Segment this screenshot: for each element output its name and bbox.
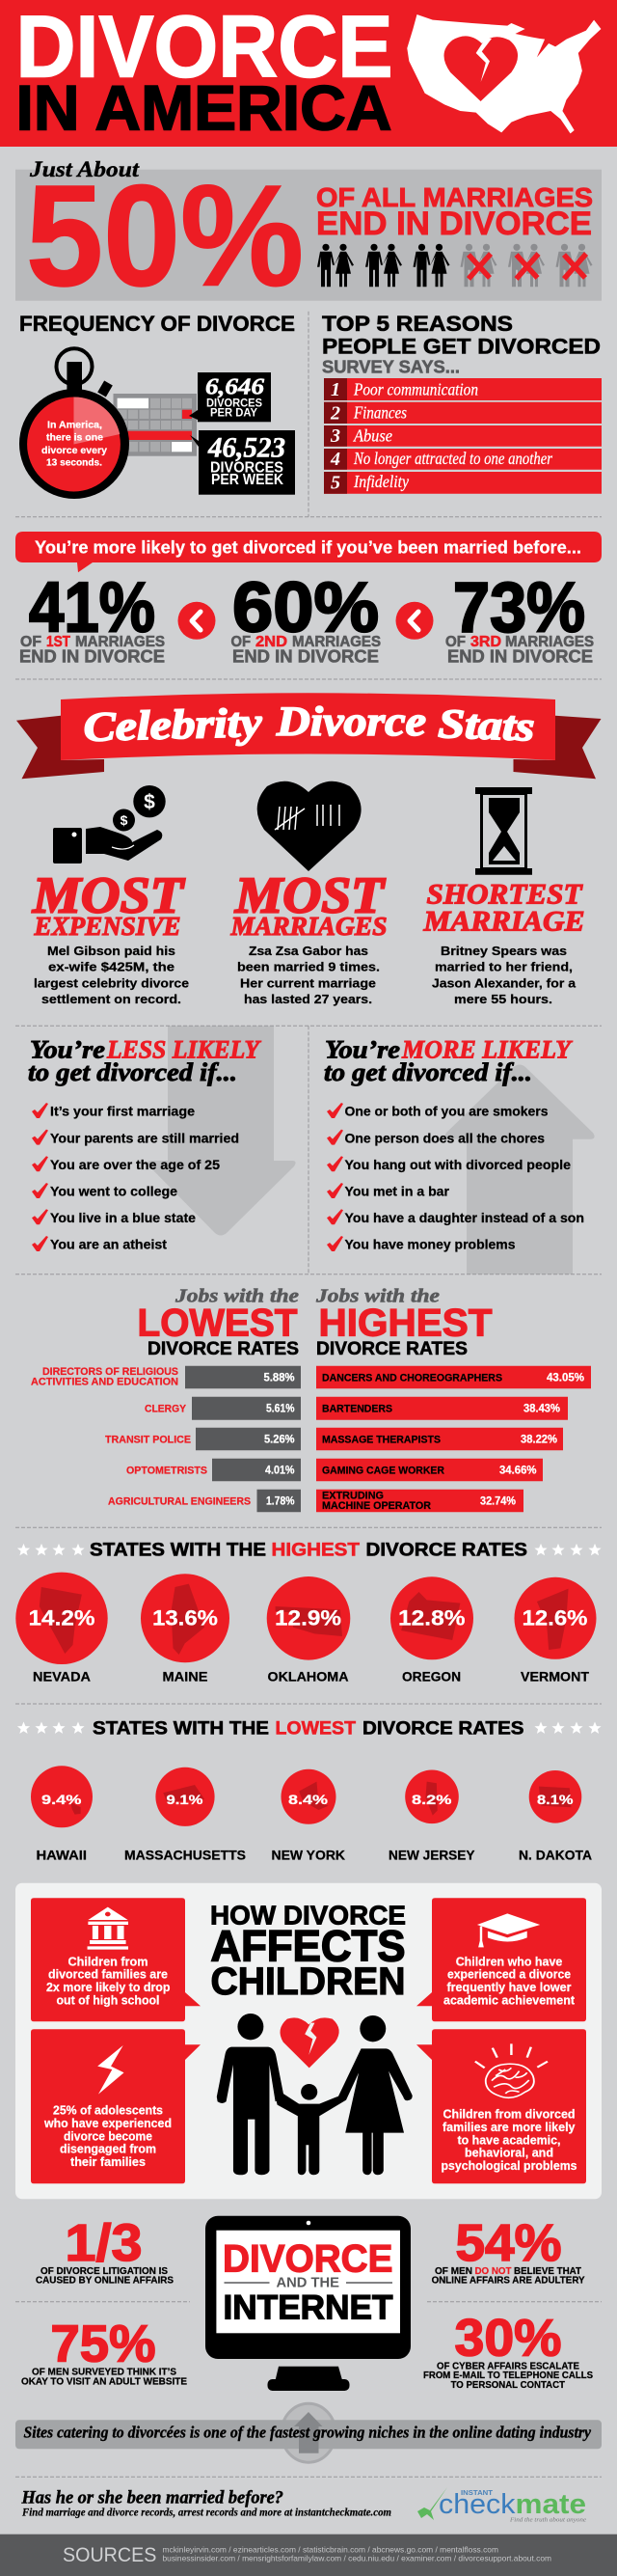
box: academic achievement: Children who have bbox=[456, 1955, 562, 1968]
stat: maine bbox=[141, 1574, 229, 1685]
callout: per day bbox=[189, 372, 271, 422]
text: every 13 seconds: there is one bbox=[46, 432, 103, 444]
stat: new jersey bbox=[389, 1769, 474, 1862]
footer: sources: SOURCES bbox=[63, 2544, 156, 2566]
stat: 30 percent bbox=[423, 2309, 593, 2391]
list: more likely: You met in a bar bbox=[345, 1185, 450, 1199]
stat: maine: 13.6% bbox=[152, 1605, 218, 1630]
list: more likely: You have money problems bbox=[345, 1238, 515, 1252]
box: drop out: out of high school bbox=[56, 1993, 160, 2007]
stat: north dakota: N. DAKOTA bbox=[519, 1848, 592, 1862]
section: top 5 reasons bbox=[322, 312, 602, 494]
column: shortest marriage: MARRIAGE bbox=[422, 905, 584, 938]
stat: 75 percent: OKAY TO VISIT AN ADULT WEBSITE bbox=[21, 2375, 187, 2387]
heading: lowest jobs: LOWEST bbox=[137, 1302, 297, 1345]
list: reasons: 5 bbox=[331, 473, 340, 494]
heading: divorce and the internet: AND THE bbox=[276, 2276, 339, 2291]
bar chart: highest divorce rates: BARTENDERS bbox=[322, 1403, 392, 1414]
box: drop out: 2x more likely to drop bbox=[46, 1981, 171, 1994]
stat: 30 percent: FROM E-MAIL TO TELEPHONE CALLS bbox=[423, 2370, 593, 2381]
box: academic achievement: experienced a divorce bbox=[447, 1968, 571, 1982]
label: just about: Just About bbox=[29, 157, 140, 181]
logo: instant checkmate: Find the truth about anyone bbox=[509, 2516, 586, 2523]
stat: massachusetts: 9.1% bbox=[166, 1792, 203, 1807]
heading: highest jobs: Jobs with the bbox=[315, 1285, 440, 1306]
call to action: Find marriage and divorce records, arrest records and more at instantcheckmate.com bbox=[21, 2507, 391, 2518]
stat: north dakota: 8.1% bbox=[537, 1792, 574, 1807]
list: reasons: Infidelity bbox=[353, 472, 409, 491]
arrow: down bbox=[148, 1026, 296, 1235]
stat: vermont bbox=[515, 1577, 596, 1685]
text: britney spears: Britney Spears was bbox=[441, 944, 567, 958]
list: less likely: You went to college bbox=[50, 1185, 178, 1199]
heading: states lowest bbox=[17, 1717, 602, 1739]
stat: nevada: NEVADA bbox=[33, 1670, 91, 1685]
stat: 30 percent: TO PERSONAL CONTACT bbox=[451, 2379, 566, 2391]
stat: 60 percent: 2ND bbox=[255, 634, 287, 650]
bar chart: highest divorce rates: DANCERS AND CHOREOGRAPHERS bbox=[322, 1372, 502, 1384]
banner: celebrity divorce stats: Celebrity bbox=[83, 700, 263, 751]
bar chart: lowest divorce rates: TRANSIT POLICE bbox=[105, 1434, 191, 1445]
heading: highest jobs bbox=[315, 1285, 492, 1359]
box: disengaged: 25% of adolescents bbox=[53, 2104, 163, 2118]
stat: new jersey: NEW JERSEY bbox=[389, 1848, 474, 1862]
panel: 50 percent bbox=[15, 154, 602, 316]
list: reasons: 2 bbox=[330, 403, 340, 425]
logo: instant checkmate: INSTANT bbox=[461, 2488, 493, 2497]
callout: per week bbox=[190, 430, 295, 495]
bar chart: highest divorce rates: 38.43% bbox=[523, 1403, 560, 1414]
heading: highest jobs: DIVORCE RATES bbox=[316, 1338, 468, 1359]
stat: 60 percent: MARRIAGES bbox=[292, 634, 381, 650]
stat: 54 percent bbox=[432, 2214, 585, 2287]
text: britney spears: Jason Alexander, for a bbox=[432, 975, 577, 990]
text: mel gibson: largest celebrity divorce bbox=[34, 975, 189, 990]
text: end in divorce: END IN DIVORCE bbox=[316, 206, 592, 242]
stat: vermont: VERMONT bbox=[521, 1670, 590, 1685]
stat: 73 percent: OF bbox=[445, 634, 466, 650]
stat: oregon bbox=[390, 1576, 473, 1685]
text: mel gibson: Mel Gibson paid his bbox=[47, 944, 175, 958]
heading: frequency: FREQUENCY OF DIVORCE bbox=[19, 312, 295, 336]
column: most expensive: EXPENSIVE bbox=[33, 912, 181, 941]
list: reasons: 3 bbox=[330, 425, 340, 447]
panel: more likely: MORE LIKELY bbox=[401, 1036, 573, 1064]
stat: 60 percent: END IN DIVORCE bbox=[232, 646, 379, 667]
bar chart: lowest divorce rates: AGRICULTURAL ENGINEERS bbox=[108, 1495, 251, 1507]
list: reasons: No longer attracted to one another bbox=[353, 449, 552, 468]
icon: calendar bbox=[114, 394, 197, 456]
text: every 13 seconds: In America, bbox=[47, 419, 102, 430]
text: zsa zsa: been married 9 times. bbox=[237, 960, 380, 974]
column: most marriages: MARRIAGES bbox=[229, 912, 388, 941]
bar chart: lowest divorce rates: CLERGY bbox=[145, 1403, 187, 1414]
text: zsa zsa bbox=[237, 944, 380, 1006]
logo: instant checkmate bbox=[417, 2487, 586, 2523]
text: every 13 seconds: divorce every bbox=[41, 445, 107, 456]
box: disengaged: who have experienced bbox=[43, 2117, 172, 2130]
panel: less likely bbox=[28, 1036, 261, 1252]
heading: top 5 reasons: PEOPLE GET DIVORCED bbox=[322, 335, 601, 359]
heading: lowest jobs bbox=[137, 1285, 299, 1359]
callout: married before: You’re more likely to get divorced if you’ve been married before... bbox=[35, 537, 581, 557]
icon: heart with tally marks bbox=[257, 781, 362, 871]
text: mel gibson bbox=[34, 944, 189, 1006]
stat: 73 percent: MARRIAGES bbox=[505, 634, 594, 650]
list: less likely: You are over the age of 25 bbox=[50, 1158, 221, 1172]
column: shortest marriage bbox=[422, 787, 584, 1006]
heading: highest jobs: HIGHEST bbox=[318, 1302, 492, 1345]
icon: US map with broken heart bbox=[407, 14, 601, 133]
stat: new york: 8.4% bbox=[288, 1792, 329, 1807]
stat: 54 percent: DO NOT bbox=[474, 2265, 512, 2277]
stat: massachusetts bbox=[124, 1768, 246, 1862]
stat: oklahoma: 12.9% bbox=[275, 1605, 341, 1630]
banner: celebrity divorce stats: Divorce bbox=[276, 699, 426, 745]
banner: celebrity divorce stats bbox=[16, 693, 602, 779]
stat: 54 percent: ONLINE AFFAIRS ARE ADULTERY bbox=[432, 2275, 585, 2287]
text: zsa zsa: Zsa Zsa Gabor has bbox=[249, 944, 368, 958]
column: most marriages bbox=[229, 781, 388, 1006]
callout: married before bbox=[15, 532, 602, 572]
bar chart: highest divorce rates: 32.74% bbox=[480, 1495, 516, 1507]
stat: 54 percent: 54% bbox=[455, 2214, 561, 2272]
list: reasons: Poor communication bbox=[353, 379, 478, 398]
callout: fastest growing niches bbox=[15, 2403, 602, 2462]
list: reasons bbox=[324, 378, 602, 494]
text: britney spears: married to her friend, bbox=[435, 960, 573, 974]
stat: north dakota bbox=[519, 1770, 592, 1862]
icon: school bbox=[88, 1907, 128, 1950]
stat: 73 percent: 73% bbox=[453, 569, 585, 646]
column: most expensive bbox=[32, 785, 189, 1006]
stat: 41 percent: 41% bbox=[29, 569, 155, 646]
list: reasons: 4 bbox=[330, 449, 340, 470]
stat: nevada bbox=[15, 1573, 108, 1685]
heading: divorce and the internet bbox=[223, 2238, 393, 2327]
panel: more likely: You’re bbox=[325, 1036, 400, 1064]
icon: graduation cap bbox=[477, 1913, 540, 1947]
stat: maine: MAINE bbox=[162, 1670, 208, 1685]
text: zsa zsa: Her current marriage bbox=[240, 975, 376, 990]
list: less likely bbox=[50, 1105, 239, 1252]
heading: states lowest: STATES WITH THE bbox=[93, 1717, 269, 1739]
heading: lowest jobs: DIVORCE RATES bbox=[148, 1338, 299, 1359]
icon: lightning bbox=[97, 2045, 124, 2095]
footer: sources: businessinsider.com / mensrightsforfamilylaw.com / cedu.niu.edu / examiner.com / divorcesupport.about.com bbox=[162, 2554, 551, 2563]
heading: top 5 reasons: SURVEY SAYS... bbox=[322, 357, 460, 377]
stat: 60 percent: OF bbox=[231, 634, 251, 650]
stat: 30 percent: 30% bbox=[455, 2309, 561, 2367]
text: of all marriages: OF ALL MARRIAGES bbox=[316, 182, 593, 212]
icons: checks bbox=[327, 1103, 343, 1251]
list: more likely: You have a daughter instead of a son bbox=[345, 1211, 584, 1225]
list: less likely: You are an atheist bbox=[50, 1238, 168, 1252]
bar chart: highest divorce rates: 34.66% bbox=[499, 1465, 536, 1476]
callout: per week: PER WEEK bbox=[211, 472, 284, 488]
stat: hawaii bbox=[31, 1766, 93, 1862]
stat: 75 percent bbox=[21, 2315, 187, 2387]
arrow: up bbox=[444, 1065, 595, 1274]
stat: hawaii: 9.4% bbox=[41, 1792, 82, 1807]
stat: 73 percent: END IN DIVORCE bbox=[447, 646, 593, 667]
heading: how divorce affects children: HOW DIVORCE bbox=[210, 1900, 406, 1930]
stat: 54 percent: OF MEN bbox=[435, 2265, 472, 2277]
stat: one third: CAUSED BY ONLINE AFFAIRS bbox=[36, 2275, 174, 2287]
box: psychological problems: to have academic, bbox=[457, 2133, 561, 2147]
callout: per day: 6,646 bbox=[205, 374, 264, 399]
list: more likely: You hang out with divorced people bbox=[345, 1158, 572, 1172]
call to action: Has he or she been married before? bbox=[21, 2487, 283, 2507]
heading: states highest bbox=[17, 1540, 602, 1561]
logo: instant checkmate: check bbox=[439, 2489, 516, 2520]
box: academic achievement bbox=[416, 1898, 586, 2021]
heading: states highest: DIVORCE RATES bbox=[366, 1540, 527, 1561]
box: drop out: Children from bbox=[67, 1955, 148, 1968]
icon: brain bbox=[475, 2043, 548, 2097]
callout: per week: 46,523 bbox=[207, 431, 285, 463]
text: britney spears: mere 55 hours. bbox=[454, 992, 552, 1006]
box: academic achievement: academic achievement bbox=[443, 1993, 576, 2007]
stat: new york: NEW YORK bbox=[272, 1848, 345, 1862]
column: most expensive: MOST bbox=[32, 868, 186, 924]
text: mel gibson: settlement on record. bbox=[41, 992, 181, 1006]
heading: top 5 reasons bbox=[322, 312, 601, 377]
bar chart: lowest divorce rates bbox=[31, 1366, 301, 1512]
stat: 41 percent: END IN DIVORCE bbox=[19, 646, 165, 667]
icon: family with broken heart bbox=[217, 2014, 413, 2175]
heading: lowest jobs: Jobs with the bbox=[174, 1285, 299, 1306]
stat: 75 percent: OF MEN SURVEYED THINK IT’S bbox=[32, 2367, 176, 2378]
icon: less than 2 bbox=[395, 602, 434, 640]
stat: 41 percent: OF bbox=[20, 634, 41, 650]
stat: 75 percent: 75% bbox=[50, 2315, 156, 2372]
callout: fastest growing niches: Sites catering to divorcées is one of the fastest growing niches in the online dating industry bbox=[23, 2424, 592, 2442]
icon: hourglass bbox=[475, 787, 532, 875]
big number 50%: 50% bbox=[26, 154, 304, 316]
bar chart: lowest divorce rates: 5.88% bbox=[264, 1372, 295, 1384]
stat: new jersey: 8.2% bbox=[412, 1792, 452, 1807]
heading: divorce and the internet: DIVORCE bbox=[223, 2238, 393, 2281]
panel: less likely: to get divorced if... bbox=[28, 1058, 237, 1086]
stat: new york bbox=[272, 1769, 345, 1862]
title: Divorce: DIVORCE bbox=[15, 0, 393, 96]
stat: one third: 1/3 bbox=[66, 2214, 143, 2272]
header banner bbox=[0, 0, 617, 147]
callout: per day: PER DAY bbox=[210, 406, 257, 420]
stat: 30 percent: OF CYBER AFFAIRS ESCALATE bbox=[437, 2360, 579, 2371]
heading: top 5 reasons: TOP 5 REASONS bbox=[322, 312, 513, 336]
stat: 41 percent: MARRIAGES bbox=[75, 634, 165, 650]
bar chart: lowest divorce rates: 5.61% bbox=[266, 1403, 295, 1414]
title: In America: IN AMERICA bbox=[15, 71, 391, 143]
icon: less than 1 bbox=[177, 602, 216, 640]
panel: less likely: LESS LIKELY bbox=[106, 1036, 261, 1064]
heading: how divorce affects children bbox=[210, 1900, 406, 2003]
heading: divorce and the internet: INTERNET bbox=[224, 2289, 393, 2327]
stat: oregon: OREGON bbox=[402, 1670, 461, 1685]
bar chart: highest divorce rates: EXTRUDING bbox=[322, 1491, 384, 1502]
bar chart: highest divorce rates bbox=[316, 1366, 591, 1512]
stat: hawaii: HAWAII bbox=[37, 1848, 87, 1862]
text: britney spears bbox=[432, 944, 577, 1006]
heading: states highest: STATES WITH THE bbox=[90, 1540, 266, 1561]
bar chart: lowest divorce rates: 4.01% bbox=[265, 1465, 295, 1476]
box: disengaged: their families bbox=[70, 2155, 146, 2169]
panel: less likely: You’re bbox=[30, 1036, 105, 1064]
callout: per week: DIVORCES bbox=[210, 459, 283, 476]
stat: vermont: 12.6% bbox=[523, 1605, 588, 1630]
stat: nevada: 14.2% bbox=[29, 1605, 94, 1630]
column: shortest marriage: SHORTEST bbox=[426, 878, 583, 911]
icon: hand with coins: $ bbox=[121, 812, 128, 828]
heading: how divorce affects children: AFFECTS bbox=[210, 1921, 405, 1970]
bar chart: highest divorce rates: 38.22% bbox=[521, 1434, 557, 1445]
heading: states highest: HIGHEST bbox=[272, 1540, 360, 1561]
bar chart: lowest divorce rates: ACTIVITIES AND EDUCATION bbox=[31, 1377, 178, 1388]
logo: instant checkmate: mate bbox=[515, 2489, 586, 2520]
stat: one third: OF DIVORCE LITIGATION IS bbox=[40, 2265, 168, 2277]
panel: more likely bbox=[324, 1036, 584, 1252]
box: disengaged bbox=[31, 2029, 201, 2183]
list: less likely: Your parents are still married bbox=[50, 1131, 239, 1145]
bar chart: lowest divorce rates: 1.78% bbox=[266, 1495, 295, 1507]
list: more likely: One person does all the chores bbox=[345, 1131, 545, 1145]
stat: 60 percent: 60% bbox=[232, 569, 379, 646]
box: psychological problems: psychological problems bbox=[442, 2159, 577, 2173]
list: reasons: Finances bbox=[353, 402, 407, 422]
list: less likely: It’s your first marriage bbox=[50, 1105, 196, 1119]
text: every 13 seconds: 13 seconds. bbox=[46, 457, 102, 469]
footer: sources: mckinleyirvin.com / ezinearticles.com / statisticbrain.com / abcnews.go.com / mentalfloss.com bbox=[162, 2545, 498, 2555]
icon: stopwatch bbox=[19, 348, 129, 499]
box: drop out bbox=[31, 1898, 201, 2021]
bar chart: lowest divorce rates: 5.26% bbox=[264, 1434, 295, 1445]
stat: oklahoma bbox=[267, 1576, 350, 1685]
box: psychological problems: families are more likely bbox=[443, 2121, 576, 2134]
list: more likely: One or both of you are smokers bbox=[345, 1105, 548, 1119]
list: reasons: Abuse bbox=[353, 425, 392, 445]
stat: massachusetts: MASSACHUSETTS bbox=[124, 1848, 246, 1862]
bar chart: lowest divorce rates: DIRECTORS OF RELIGIOUS bbox=[42, 1366, 178, 1378]
stat: oregon: 12.8% bbox=[398, 1605, 465, 1630]
bar chart: highest divorce rates: GAMING CAGE WORKER bbox=[322, 1465, 444, 1476]
footer: sources bbox=[0, 2535, 617, 2576]
icon: hand with coins bbox=[53, 785, 166, 863]
list: reasons: 1 bbox=[331, 379, 340, 400]
box: psychological problems: Children from divorced bbox=[443, 2108, 575, 2122]
stat: oklahoma: OKLAHOMA bbox=[268, 1670, 349, 1685]
stat: one third bbox=[36, 2214, 174, 2287]
bar chart: highest divorce rates: MACHINE OPERATOR bbox=[322, 1500, 431, 1512]
bar chart: lowest divorce rates: OPTOMETRISTS bbox=[126, 1465, 207, 1476]
box: disengaged: divorce become bbox=[64, 2129, 152, 2143]
text: every 13 seconds bbox=[41, 419, 107, 469]
callout: per day: DIVORCES bbox=[206, 397, 262, 410]
icon: monitor bbox=[205, 2216, 411, 2391]
call to action bbox=[21, 2487, 391, 2518]
text: mel gibson: ex-wife $425M, the bbox=[48, 960, 174, 974]
box: disengaged: disengaged from bbox=[60, 2143, 156, 2156]
heading: states lowest: LOWEST bbox=[276, 1717, 356, 1739]
icon: hand with coins: $ bbox=[144, 791, 155, 813]
bar chart: highest divorce rates: 43.05% bbox=[547, 1372, 584, 1384]
stat: 73 percent: 3RD bbox=[470, 634, 501, 650]
list: more likely bbox=[345, 1105, 584, 1252]
stat: 41 percent: 1ST bbox=[46, 634, 70, 650]
panel: how divorce affects children bbox=[15, 1883, 602, 2199]
banner: celebrity divorce stats: Stats bbox=[438, 701, 535, 751]
box: psychological problems bbox=[416, 2029, 586, 2183]
icons: checks bbox=[32, 1103, 48, 1251]
bar chart: highest divorce rates: MASSAGE THERAPISTS bbox=[322, 1434, 441, 1445]
column: most marriages: MOST bbox=[234, 868, 387, 924]
box: psychological problems: behavioral, and bbox=[465, 2147, 553, 2160]
section: frequency of divorce bbox=[19, 312, 295, 499]
heading: how divorce affects children: CHILDREN bbox=[210, 1960, 405, 2003]
icons: couples bbox=[317, 244, 592, 287]
panel: more likely: to get divorced if... bbox=[324, 1058, 532, 1086]
box: drop out: divorced families are bbox=[48, 1968, 168, 1982]
heading: states lowest: DIVORCE RATES bbox=[362, 1717, 524, 1739]
list: less likely: You live in a blue state bbox=[50, 1211, 197, 1225]
text: zsa zsa: has lasted 27 years. bbox=[244, 992, 372, 1006]
box: academic achievement: frequently have lower bbox=[447, 1981, 572, 1994]
stat: 54 percent: BELIEVE THAT bbox=[514, 2265, 582, 2277]
